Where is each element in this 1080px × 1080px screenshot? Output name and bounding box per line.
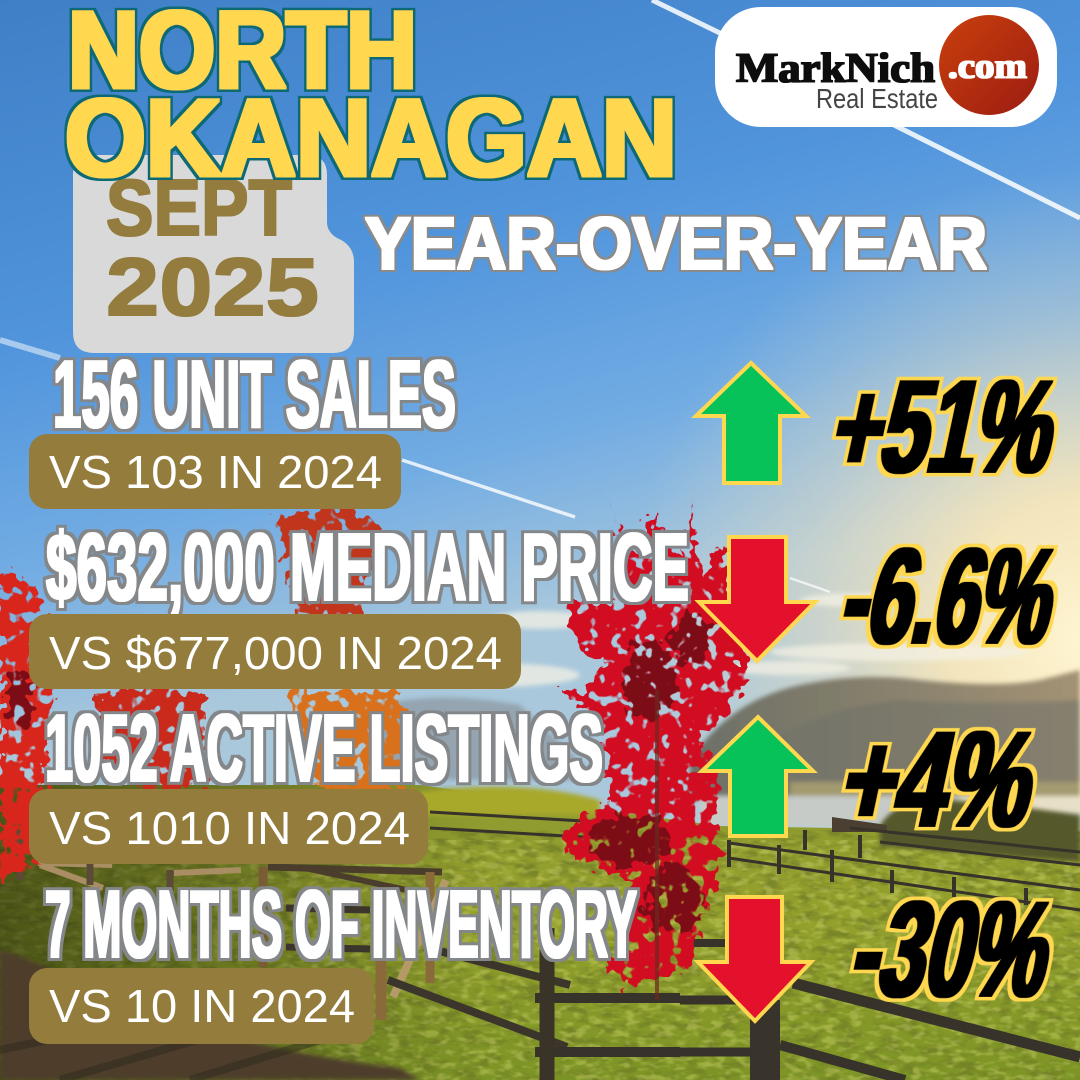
date: year: 2025 xyxy=(106,242,319,333)
logo: brand name: MarkNich xyxy=(736,46,935,92)
arrow: sales up xyxy=(696,363,806,483)
title: OKANAGAN xyxy=(65,77,677,200)
pill: prior year listings: VS 1010 IN 2024 xyxy=(49,802,410,854)
logo xyxy=(715,7,1057,127)
logo: domain: .com xyxy=(948,46,1027,86)
stat: active listings xyxy=(29,695,603,864)
stat: months of inventory xyxy=(29,871,637,1044)
arrow: price down xyxy=(699,537,815,661)
logo: tagline: Real Estate xyxy=(816,83,938,114)
pill: prior year inventory: VS 10 IN 2024 xyxy=(49,980,355,1032)
pill: prior year listings xyxy=(29,789,428,864)
pill: prior year inventory xyxy=(29,968,374,1044)
date: month: SEPT xyxy=(106,163,292,252)
stat: unit sales: 156 UNIT SALES xyxy=(53,341,456,448)
stat: active listings: 1052 ACTIVE LISTINGS xyxy=(45,695,603,802)
panel: date badge xyxy=(73,155,354,353)
pill: prior year sales xyxy=(29,434,401,509)
arrow: inventory down xyxy=(698,897,811,1021)
pill: prior year sales: VS 103 IN 2024 xyxy=(49,446,382,498)
title xyxy=(65,0,677,200)
arrow: listings up xyxy=(702,717,813,836)
pill: prior year price xyxy=(29,614,521,689)
logo: red circle xyxy=(939,15,1039,115)
subtitle: YEAR-OVER-YEAR xyxy=(365,202,987,285)
stat: unit sales xyxy=(29,341,456,509)
stat: median price xyxy=(29,514,689,689)
pill: prior year price: VS $677,000 IN 2024 xyxy=(49,627,502,679)
